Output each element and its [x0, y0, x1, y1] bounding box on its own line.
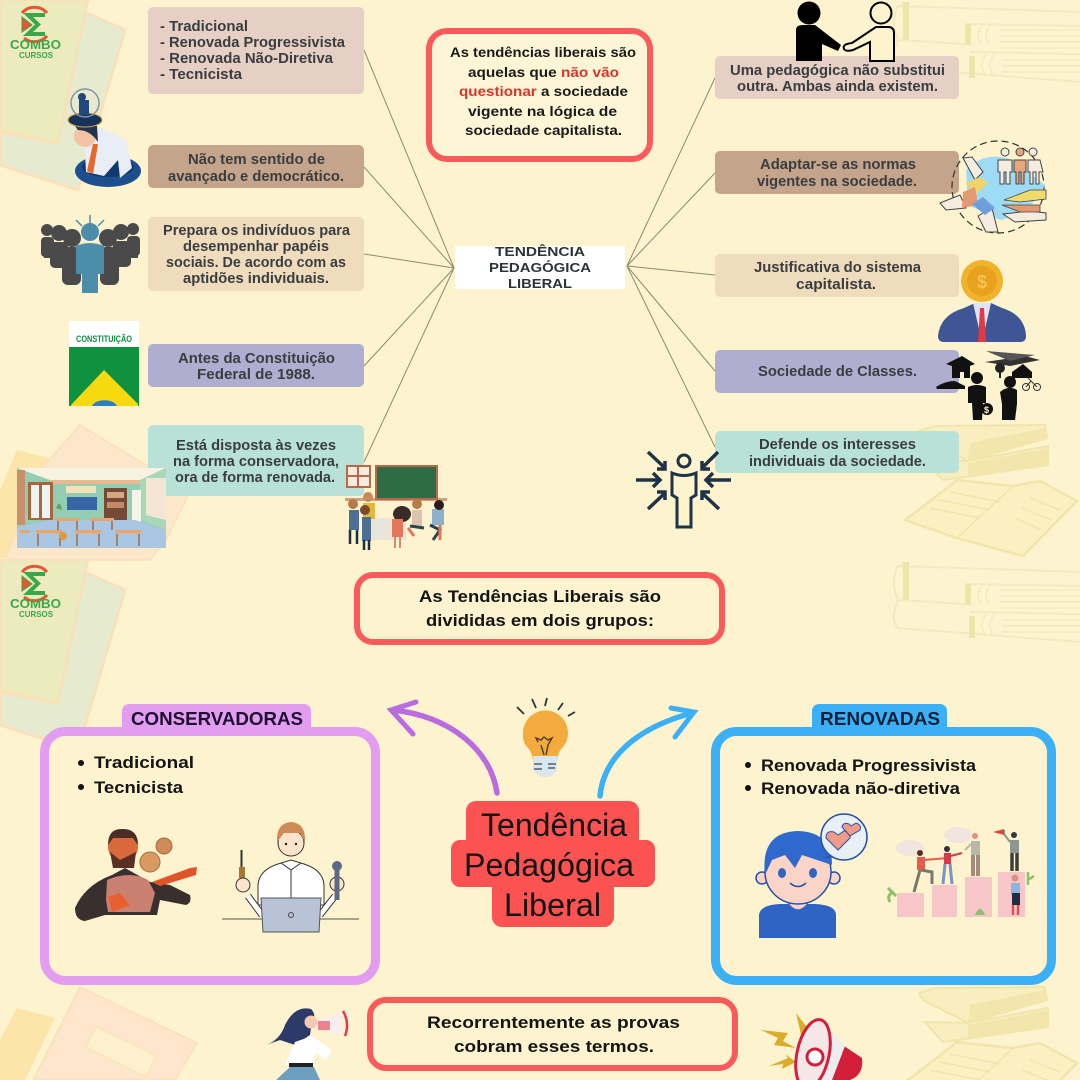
panel: conservadoras: Tradicional: [94, 753, 194, 772]
left box: list of tendencies: - Tradicional: [160, 19, 248, 35]
logo: Combo Cursos (top): [10, 7, 61, 60]
right box: capitalist system: Justificativa do sistema: [754, 260, 922, 276]
right box: adapt to norms: [715, 151, 959, 194]
left box: conservative or renewed: ora de forma renovada.: [175, 470, 335, 486]
right box: class society: [715, 350, 959, 393]
callout: recurring in exams: [370, 1000, 735, 1068]
arrow: to renovadas: [600, 708, 694, 796]
panel: renovadas: [716, 704, 1052, 980]
right box: capitalist system: capitalista.: [796, 277, 876, 293]
right box: one does not replace another: Uma pedagógica não substitui: [730, 63, 945, 79]
icon: hands and puzzle pieces: [940, 141, 1046, 233]
right box: individual interests: Defende os interesses: [759, 437, 916, 453]
panel: renovadas: RENOVADAS: [820, 709, 940, 729]
icon: constitution cover: [69, 321, 139, 406]
central node: Tendência Pedagógica Liberal: LIBERAL: [508, 276, 572, 291]
left box: before the constitution: Federal de 1988.: [197, 367, 315, 383]
right box: adapt to norms: Adaptar-se as normas: [760, 157, 916, 173]
icon: social classes silhouettes: [936, 351, 1040, 420]
right box: adapt to norms: vigentes na sociedade.: [757, 174, 917, 190]
illustration: teacher with pupils: [345, 466, 447, 550]
icon: crowd with highlighted person: [41, 215, 140, 293]
icon: coin-headed businessman: $: [977, 272, 987, 292]
icon: handshake: [796, 2, 894, 61]
callout: two groups: As Tendências Liberais são: [419, 587, 661, 606]
left box: not advanced: [148, 145, 364, 188]
illustration: man with piggy bank: [75, 829, 197, 921]
central heading: Tendência Pedagógica Liberal: Tendência: [481, 807, 627, 843]
left box: conservative or renewed: [148, 425, 364, 496]
panel: renovadas: Renovada não-diretiva: [761, 779, 961, 798]
icon: person with inward arrows: [636, 452, 731, 527]
right box: one does not replace another: outra. Ambas ainda existem.: [737, 79, 938, 95]
left box: prepares individuals: desempenhar papéis: [183, 239, 329, 255]
right box: class society: Sociedade de Classes.: [758, 364, 917, 380]
icon: coin-headed businessman: [938, 260, 1026, 342]
panel: conservadoras: CONSERVADORAS: [131, 709, 303, 729]
icon: light bulb: [517, 698, 575, 777]
left box: not advanced: Não tem sentido de: [188, 152, 325, 168]
panel: conservadoras: [44, 704, 376, 980]
left box: before the constitution: [148, 344, 364, 387]
icon: man with caged head: [68, 89, 141, 187]
callout: definition: [429, 31, 650, 159]
icon: constitution cover: CONSTITUIÇÃO: [76, 334, 132, 344]
central heading: Tendência Pedagógica Liberal: Liberal: [504, 887, 601, 923]
left box: prepares individuals: aptidões individuais.: [183, 271, 329, 287]
callout: definition: As tendências liberais são: [450, 44, 636, 60]
arrow: to conservadoras: [391, 702, 497, 793]
central node: Tendência Pedagógica Liberal: PEDAGÓGICA: [489, 260, 592, 275]
left box: prepares individuals: [148, 217, 364, 291]
left box: list of tendencies: - Renovada Não-Diretiva: [160, 51, 334, 67]
central heading: Tendência Pedagógica Liberal: [451, 801, 655, 927]
central node: Tendência Pedagógica Liberal: [455, 244, 625, 291]
connector lines: [364, 50, 715, 462]
right box: individual interests: individuais da sociedade.: [749, 454, 926, 470]
left box: list of tendencies: - Tecnicista: [160, 67, 243, 83]
panel: conservadoras: Tecnicista: [94, 778, 184, 797]
callout: two groups: divididas em dois grupos:: [426, 611, 654, 630]
illustration: red megaphone with bolts: [761, 1013, 862, 1080]
callout: definition: questionar a sociedade: [459, 83, 628, 99]
left box: prepares individuals: Prepara os indivíduos para: [163, 223, 351, 239]
right box: one does not replace another: [715, 56, 959, 99]
illustration: classroom: [17, 468, 166, 548]
callout: definition: vigente na lógica de: [468, 103, 617, 119]
central heading: Tendência Pedagógica Liberal: Pedagógica: [464, 847, 634, 883]
illustration: boy with hearts bubble: [756, 814, 867, 938]
callout: definition: sociedade capitalista.: [465, 122, 622, 138]
right box: capitalist system: [715, 254, 959, 297]
right box: individual interests: [715, 431, 959, 473]
central node: Tendência Pedagógica Liberal: TENDÊNCIA: [495, 244, 586, 259]
left box: list of tendencies: [148, 7, 364, 94]
icon: social classes silhouettes: $: [984, 405, 989, 415]
illustration: technician with laptop: [222, 822, 359, 932]
panel: renovadas: Renovada Progressivista: [761, 756, 977, 775]
left box: conservative or renewed: Está disposta às vezes: [176, 438, 336, 454]
left box: conservative or renewed: na forma conservadora,: [173, 454, 339, 470]
left box: before the constitution: Antes da Constituição: [178, 351, 335, 367]
callout: two groups: [357, 575, 722, 642]
left box: list of tendencies: - Renovada Progressivista: [160, 35, 346, 51]
callout: recurring in exams: Recorrentemente as provas: [427, 1013, 680, 1032]
illustration: people climbing steps: [888, 827, 1034, 917]
illustration: woman with megaphone: [266, 1008, 347, 1080]
callout: definition: aquelas que não vão: [468, 64, 619, 80]
logo: Combo Cursos (lower): [10, 566, 61, 619]
callout: recurring in exams: cobram esses termos.: [454, 1037, 654, 1056]
left box: prepares individuals: sociais. De acordo com as: [166, 255, 346, 271]
left box: not advanced: avançado e democrático.: [168, 169, 344, 185]
